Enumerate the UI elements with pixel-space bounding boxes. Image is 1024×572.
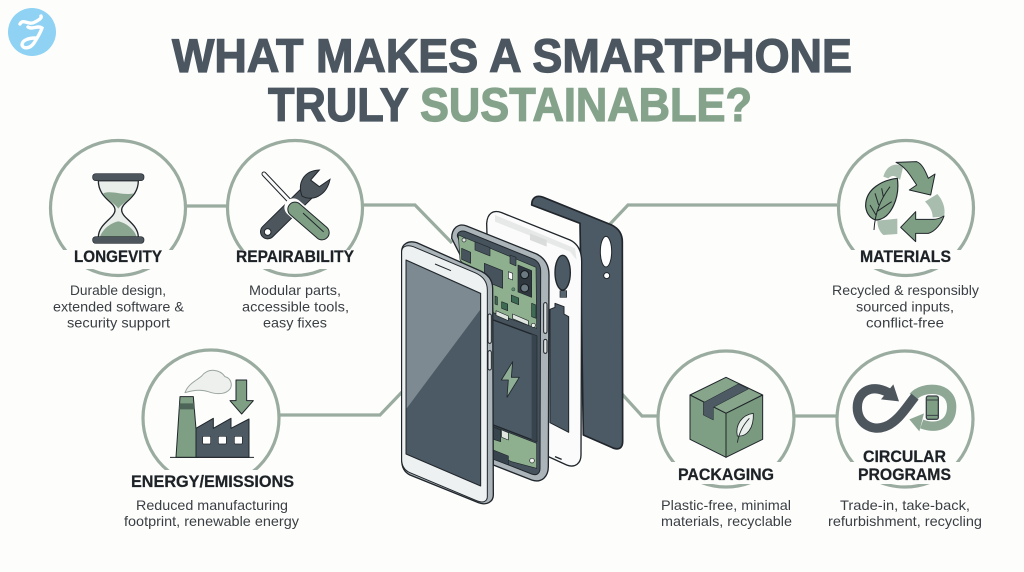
description: repairability: Modular parts, bbox=[249, 282, 341, 298]
description: energy and emissions: Reduced manufacturing bbox=[136, 497, 288, 513]
title: TRULY SUSTAINABLE? bbox=[268, 78, 752, 131]
icon: recycling arrows and leaf bbox=[866, 162, 945, 242]
screen bbox=[406, 260, 481, 486]
logo badge bbox=[8, 8, 56, 56]
panel: repairability bbox=[228, 140, 362, 330]
icon: wrench and screwdriver bbox=[264, 170, 330, 235]
circuit board upper bbox=[458, 235, 537, 328]
icon: cardboard box with leaf bbox=[690, 377, 763, 457]
description: materials bbox=[832, 282, 979, 330]
description: repairability: easy fixes bbox=[263, 314, 327, 330]
back cover layer bbox=[532, 196, 623, 449]
panel: materials bbox=[832, 140, 979, 330]
title: WHAT MAKES A SMARTPHONE bbox=[172, 29, 852, 82]
side buttons bbox=[544, 303, 547, 333]
description: longevity: extended software & bbox=[53, 298, 185, 314]
label: longevity: LONGEVITY bbox=[74, 248, 162, 266]
title bbox=[172, 29, 852, 131]
icon: factory with down arrow bbox=[170, 370, 254, 457]
description: materials: sourced inputs, bbox=[856, 298, 954, 314]
description: repairability bbox=[242, 282, 349, 330]
panel: energy and emissions bbox=[124, 350, 299, 529]
exploded smartphone illustration bbox=[402, 196, 623, 504]
description: circular programs: refurbishment, recycling bbox=[828, 513, 982, 529]
description: energy and emissions: footprint, renewable energy bbox=[124, 513, 299, 529]
label: circular programs: PROGRAMS bbox=[858, 466, 951, 484]
description: longevity bbox=[53, 282, 185, 330]
label: packaging: PACKAGING bbox=[678, 466, 774, 484]
description: longevity: Durable design, bbox=[70, 282, 166, 298]
connector lines bbox=[186, 205, 837, 416]
icon: hourglass bbox=[93, 174, 144, 243]
description: repairability: accessible tools, bbox=[242, 298, 349, 314]
description: packaging: materials, recyclable bbox=[661, 513, 792, 529]
label: energy and emissions: ENERGY/EMISSIONS bbox=[131, 473, 294, 491]
label: materials: MATERIALS bbox=[860, 248, 951, 266]
description: energy and emissions bbox=[124, 497, 299, 529]
description: circular programs: Trade-in, take-back, bbox=[840, 497, 970, 513]
description: packaging: Plastic-free, minimal bbox=[661, 497, 791, 513]
label: repairability: REPAIRABILITY bbox=[236, 248, 354, 266]
label: circular programs: CIRCULAR bbox=[863, 448, 946, 466]
main frame with circuit board and battery bbox=[452, 225, 549, 481]
description: circular programs bbox=[828, 497, 982, 529]
panel: circular programs bbox=[828, 351, 982, 529]
description: materials: conflict-free bbox=[866, 314, 944, 330]
panel: longevity bbox=[50, 140, 186, 330]
battery bbox=[492, 319, 537, 442]
circuit board lower bbox=[492, 426, 537, 468]
panel: packaging bbox=[658, 351, 794, 529]
label: circular programs bbox=[858, 448, 951, 484]
description: longevity: security support bbox=[67, 314, 170, 330]
description: materials: Recycled & responsibly bbox=[832, 282, 979, 298]
description: packaging bbox=[661, 497, 792, 529]
white mid frame layer bbox=[487, 212, 582, 466]
icon: battery bolt bbox=[501, 362, 519, 397]
icon: circular loop with phone bbox=[857, 384, 952, 431]
front screen layer bbox=[402, 242, 493, 504]
